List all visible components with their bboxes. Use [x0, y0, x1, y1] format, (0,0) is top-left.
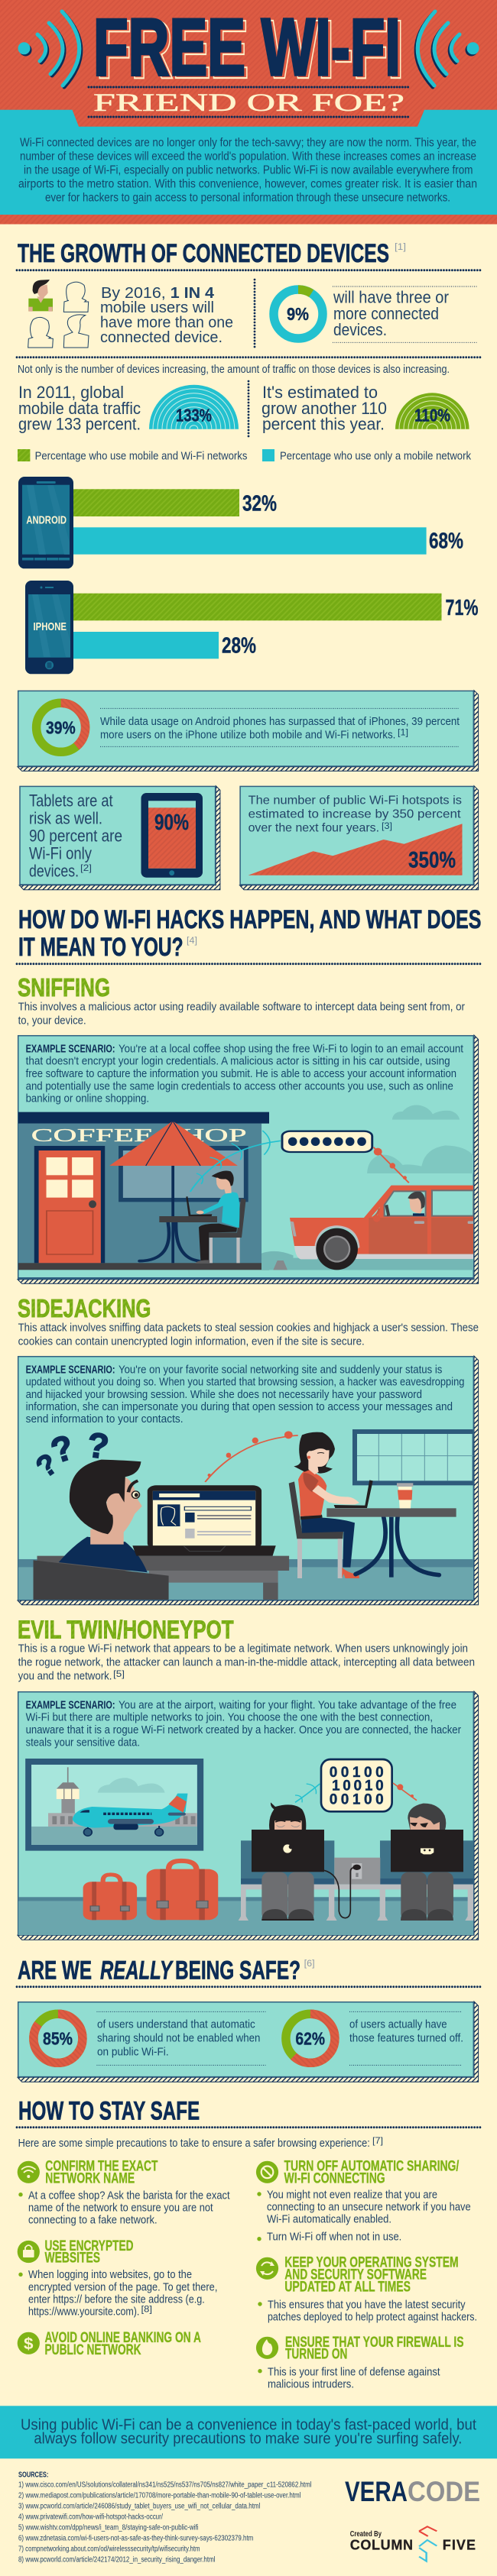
text block — [26, 1043, 463, 1105]
data bubble — [321, 1759, 392, 1811]
cafe table — [326, 1483, 456, 1578]
chart: 39 percent donut — [37, 703, 86, 752]
driver — [408, 1192, 425, 1216]
bar chart: android: 32% — [242, 491, 277, 516]
logo: veracode — [345, 2476, 480, 2507]
tip: confirm network name: NETWORK NAME — [45, 2171, 135, 2187]
tip: use encrypted websites: When logging into websites, go to the — [28, 2269, 192, 2281]
panel: safety statistics — [18, 2002, 479, 2082]
tip: turn off automatic sharing: Turn Wi-Fi off when not in use. — [267, 2231, 401, 2244]
section: sidejacking — [18, 1294, 479, 1348]
text block: free software to capture the information you submit. He is able to access your account information — [26, 1068, 456, 1080]
binary digits: 1 0 0 1 0 — [332, 1778, 384, 1794]
text block: send information to your contacts. — [26, 1413, 184, 1426]
text block: estimated to increase by 350 percent — [248, 808, 461, 821]
tip: confirm network name: CONFIRM THE EXACT — [45, 2159, 158, 2175]
window — [355, 1432, 475, 1483]
icon: flame — [256, 2337, 278, 2359]
question marks: ? — [46, 1426, 79, 1471]
illustration: coffee shop and car — [18, 1105, 474, 1270]
person two hacker — [391, 1804, 463, 1921]
text block — [248, 794, 462, 835]
text block: Wi-Fi but there are multiple networks to join. You choose the one with the best connection, — [26, 1712, 433, 1724]
chart: 85 percent donut: 85% — [43, 2029, 73, 2049]
icon: dollar: $ — [24, 2335, 34, 2353]
stat: 110 percent growth: It's estimated to — [262, 383, 378, 402]
sources: 1) www.cisco.com/en/US/solutions/collateral/ns341/ns525/ns537/ns705/ns827/white_paper_c11-520862.html — [18, 2481, 312, 2490]
text block: While data usage on Android phones has surpassed that of iPhones, 39 percent — [100, 715, 460, 728]
stat: 1 in 4: By 2016, 1 IN 4 — [101, 284, 215, 302]
heading: how do wi-fi hacks happen: IT MEAN TO YOU? — [18, 933, 184, 962]
text block: devices. — [29, 861, 79, 880]
stat: 133 percent growth — [18, 383, 239, 434]
icon: padlock — [18, 2241, 40, 2263]
heading: are we really being safe: [6] — [304, 1960, 315, 1969]
tip: use encrypted websites: enter https:// before the site address (e.g. — [28, 2293, 205, 2306]
bar chart: iphone: 28% — [222, 633, 256, 658]
chart: 9 percent donut — [274, 290, 323, 338]
sources: 6) www.zdnetasia.com/wi-fi-users-not-as-safe-as-they-think-survey-says-62302379.htm — [18, 2535, 253, 2543]
binary digits: 0 0 1 0 0 — [330, 1792, 384, 1808]
heading: how do wi-fi hacks happen: [4] — [187, 937, 197, 946]
password bubble — [282, 1131, 372, 1152]
umbrella and table — [109, 1121, 238, 1263]
chart: 9 percent donut: 9% — [287, 304, 309, 324]
tip: keep software updated: UPDATED AT ALL TIMES — [284, 2280, 411, 2296]
bar chart: iphone: 71% — [445, 596, 479, 620]
tip: ensure firewall is on: malicious intruders. — [268, 2378, 354, 2390]
legend: Percentage who use only a mobile network — [280, 450, 471, 463]
tip: ensure firewall is on: TURNED ON — [285, 2347, 347, 2363]
icon: man with phone — [28, 280, 53, 312]
chart: 39 percent donut: 39% — [46, 718, 76, 738]
panel: tablets — [19, 786, 220, 890]
icon: wi-fi — [18, 2161, 40, 2183]
section: sniffing: to, your device. — [18, 1015, 86, 1027]
stat: 110 percent growth: grow another 110 — [261, 399, 387, 418]
sources: 7) compnetworking.about.com/od/wirelesssecurity/tp/wifisecurity.htm — [18, 2545, 200, 2554]
section: evil twin: EVIL TWIN/HONEYPOT — [18, 1615, 234, 1643]
signal — [190, 1131, 281, 1192]
sources: 5) www.wishtv.com/dpp/news/i_team_8/staying-safe-on-public-wifi — [18, 2524, 199, 2532]
text block — [349, 2011, 463, 2065]
text block: 90 percent are — [29, 826, 122, 845]
airport window with plane — [25, 1759, 203, 1851]
tip: avoid online banking: AVOID ONLINE BANKING ON A — [44, 2330, 201, 2346]
icon: tablet 90 percent: 90% — [154, 811, 189, 835]
text block: You're on your favorite social networking site and suddenly your status is — [119, 1364, 442, 1376]
tip: turn off automatic sharing: WI-FI CONNECTING — [284, 2171, 385, 2187]
panel: sniffing scenario — [18, 1035, 479, 1283]
text block: [3] — [382, 820, 392, 831]
text block: steals your sensitive data. — [26, 1736, 140, 1749]
icon: refresh — [256, 2257, 278, 2280]
text block: on public Wi-Fi. — [97, 2045, 169, 2058]
tip: turn off automatic sharing: You might not even realize that you are — [267, 2189, 437, 2201]
icon: iphone — [25, 581, 73, 674]
heading: how to stay safe: HOW TO STAY SAFE — [18, 2096, 200, 2125]
heading: the growth of connected devices: [1] — [395, 243, 406, 252]
header banner — [0, 0, 497, 225]
question marks: ? — [30, 1447, 64, 1484]
panel: iphone vs android usage — [18, 691, 479, 771]
bar chart: iphone — [25, 581, 479, 674]
text block: [1] — [398, 727, 408, 738]
icon: tablet 90 percent — [141, 793, 203, 878]
text block: The number of public Wi-Fi hotspots is — [248, 794, 462, 807]
shop sign: COFFEE SHOP — [31, 1125, 247, 1146]
person at laptop — [159, 1170, 246, 1264]
legend: Percentage who use mobile and Wi-Fi networks — [35, 450, 247, 463]
tip: ensure firewall is on — [256, 2335, 464, 2390]
question marks — [37, 1432, 109, 1476]
question marks: ? — [85, 1424, 112, 1467]
section: evil twin: you and the network. — [18, 1670, 112, 1683]
section: sidejacking: SIDEJACKING — [18, 1294, 151, 1322]
stat: 1 in 4 — [100, 284, 233, 346]
tip: confirm network name: connecting to a fake network. — [28, 2215, 158, 2227]
logo: veracode: VERA — [345, 2476, 408, 2507]
text block: You're at a local coffee shop using the free Wi-Fi to login to an email account — [119, 1043, 463, 1055]
icon: dollar — [18, 2332, 40, 2354]
tip: ensure firewall is on: This is your first line of defense against — [268, 2366, 440, 2378]
illustration: sidejacking scene — [18, 1424, 475, 1600]
panel: hotspots — [239, 786, 479, 890]
logo: column five: COLUMN — [350, 2537, 413, 2552]
chart: 62 percent donut — [286, 2014, 335, 2063]
tip: keep software updated: AND SECURITY SOFTWARE — [284, 2267, 427, 2283]
tip: confirm network name: name of the network to ensure you are not — [28, 2202, 213, 2214]
stat: 1 in 4: mobile users will — [100, 299, 214, 316]
confused man — [34, 1460, 169, 1600]
tip: use encrypted websites: WEBSITES — [44, 2251, 100, 2267]
text block: and potentially use the same login credentials to access other accounts you use, such as online — [26, 1080, 453, 1092]
text block: unaware that it is a rogue Wi-Fi network created by a hacker. Once you are connected, the hacker — [26, 1724, 461, 1736]
sources: 3) www.pcworld.com/article/246086/study_tablet_buyers_use_wifi_not_cellular_data.html — [18, 2503, 260, 2511]
chart: 85 percent donut — [34, 2014, 83, 2063]
stat: 133 percent growth: grew 133 percent. — [18, 415, 141, 434]
stat: three or more devices: will have three or — [333, 288, 449, 307]
tip: turn off automatic sharing — [256, 2159, 471, 2244]
bar chart: android — [18, 477, 463, 568]
text block — [29, 791, 122, 880]
text: precautions intro: Here are some simple precautions to take to ensure a safer browsing experience: — [18, 2137, 370, 2150]
logo: column five — [350, 2526, 476, 2561]
text block: Tablets are at — [29, 791, 113, 810]
chart: 62 percent donut: 62% — [295, 2029, 325, 2049]
text block: of users actually have — [349, 2018, 447, 2031]
text block: EXAMPLE SCENARIO: — [26, 1700, 115, 1712]
chart: area 350 percent: 350% — [408, 847, 456, 872]
tip: confirm network name: At a coffee shop? Ask the barista for the exact — [28, 2189, 230, 2202]
closing banner: Using public Wi-Fi can be a convenience in today's fast-paced world, but — [21, 2417, 476, 2434]
benches — [239, 1840, 476, 1921]
section: sniffing — [18, 973, 465, 1027]
car — [261, 1186, 474, 1270]
section: sidejacking: cookies can contain unencrypted login information, even if the site is secure. — [18, 1335, 365, 1348]
closing banner: always follow security precautions to make sure you're surfing safely. — [34, 2431, 462, 2448]
stat: 110 percent growth: percent this year. — [262, 415, 385, 434]
tip: use encrypted websites: encrypted version of the page. To get there, — [28, 2281, 217, 2293]
text block: that doesn't encrypt your login credentials. A malicious actor is sitting in his car outside, using — [26, 1056, 450, 1068]
stat: three or more devices: more connected — [333, 304, 439, 323]
text block: of users understand that automatic — [97, 2018, 255, 2031]
chart: green half-circle signal — [395, 393, 469, 429]
text block: risk as well. — [29, 808, 102, 827]
woman at laptop — [289, 1432, 373, 1578]
icon: android phone — [18, 477, 73, 568]
sources: SOURCES: — [18, 2470, 48, 2479]
text block: You are at the airport, waiting for your flight. You take advantage of the free — [119, 1700, 456, 1712]
luggage — [83, 1861, 218, 1920]
stat: three or more devices — [333, 286, 478, 342]
intro panel — [0, 110, 497, 215]
stat: three or more devices: devices. — [333, 320, 387, 339]
panel: sidejacking scenario — [18, 1356, 479, 1605]
tip: avoid online banking — [18, 2330, 201, 2358]
person one — [252, 1802, 324, 1921]
chart: teal half-circle signal: 133% — [176, 406, 212, 426]
section: sniffing: SNIFFING — [18, 973, 110, 1002]
heading: are we really being safe: BEING SAFE? — [175, 1956, 300, 1985]
tip: confirm network name — [18, 2159, 230, 2227]
text block: over the next four years. — [248, 822, 379, 835]
text block: Wi-Fi only — [29, 843, 92, 862]
logo: column five: FIVE — [443, 2537, 476, 2552]
tip: keep software updated — [256, 2255, 477, 2323]
illustration: airport scene — [18, 1759, 476, 1935]
hacking signal — [205, 1431, 298, 1482]
tip: avoid online banking: PUBLIC NETWORK — [44, 2342, 141, 2358]
stat: 133 percent growth: mobile data traffic — [18, 399, 141, 418]
tip: keep software updated: This ensures that you have the latest security — [268, 2299, 466, 2311]
sources — [18, 2470, 312, 2565]
text block: banking or online shopping. — [26, 1092, 149, 1105]
sources: 2) www.mediapost.com/publications/article/170708/more-portable-than-mobile-90-of-tablet-use-over.html — [18, 2492, 301, 2500]
text block: and hijacked your browsing session. While she does not necessarily have your password — [26, 1389, 422, 1401]
chart: green half-circle signal: 110% — [414, 406, 450, 426]
tip: turn off automatic sharing: connecting to an unsecure network if you have — [267, 2201, 471, 2213]
tip: use encrypted websites: https://www.yoursite.com). — [28, 2306, 139, 2319]
text block — [26, 1700, 461, 1749]
sources: 4) www.privatewifi.com/how-wifi-hotspot-hacks-occur/ — [18, 2513, 163, 2522]
heading: how do wi-fi hacks happen — [17, 905, 481, 964]
laptop with social feed — [132, 1485, 276, 1556]
stat: 110 percent growth — [261, 383, 469, 434]
panel: evil twin scenario — [18, 1691, 479, 1940]
cable — [324, 1867, 355, 1918]
text block: more users on the iPhone utilize both mobile and Wi-Fi networks. — [100, 729, 395, 742]
icon: no symbol — [256, 2161, 278, 2183]
text block — [100, 708, 460, 746]
logo: veracode: CODE — [408, 2476, 480, 2507]
door — [34, 1146, 105, 1263]
section: evil twin: [5] — [113, 1668, 125, 1679]
hacking signal — [373, 1147, 409, 1183]
sources: 8) www.pcworld.com/article/242174/2012_in_security_rising_danger.html — [18, 2556, 216, 2565]
closing banner — [0, 2406, 497, 2458]
text block — [96, 2011, 265, 2065]
heading: are we really being safe — [17, 1956, 480, 1987]
logo: column five: Created By — [350, 2530, 382, 2539]
tip: use encrypted websites — [18, 2238, 217, 2319]
text block — [26, 1364, 464, 1426]
text block: [2] — [80, 862, 92, 873]
tip: use encrypted websites: USE ENCRYPTED — [44, 2238, 133, 2254]
tip: use encrypted websites: [8] — [141, 2304, 152, 2315]
subtitle: FRIEND OR FOE? — [93, 89, 404, 117]
bar chart: android: 68% — [429, 529, 463, 554]
section: evil twin — [18, 1615, 475, 1683]
stat: 1 in 4: have more than one — [100, 313, 233, 332]
signals — [295, 1783, 417, 1802]
stat: 133 percent growth: In 2011, global — [18, 383, 124, 402]
text block: EXAMPLE SCENARIO: — [26, 1043, 115, 1055]
text block: information, she can impersonate you during that open session to access your messages and — [26, 1401, 453, 1413]
stat: 1 in 4: connected device. — [100, 328, 223, 346]
text block: those features turned off. — [349, 2031, 463, 2044]
icon: android phone: ANDROID — [26, 515, 67, 527]
heading: are we really being safe: ARE WE — [18, 1956, 92, 1985]
icon: iphone: IPHONE — [34, 621, 67, 633]
text block: EXAMPLE SCENARIO: — [26, 1364, 115, 1376]
icon: wi-fi signal right — [416, 11, 479, 87]
text block: sharing should not be enabled when — [97, 2031, 260, 2044]
icon: wi-fi signal left — [18, 11, 81, 87]
binary digits — [330, 1766, 384, 1804]
heading: are we really being safe: REALLY — [100, 1956, 174, 1985]
text: precautions intro: [7] — [372, 2135, 383, 2146]
legend — [18, 449, 471, 463]
icon: people, one in four — [28, 280, 89, 348]
chart: teal half-circle signal — [149, 385, 239, 429]
chart: area 350 percent — [248, 824, 462, 875]
binary digits: 0 0 1 0 0 — [330, 1765, 384, 1781]
tip: turn off automatic sharing: Wi-Fi automatically enabled. — [267, 2213, 391, 2225]
